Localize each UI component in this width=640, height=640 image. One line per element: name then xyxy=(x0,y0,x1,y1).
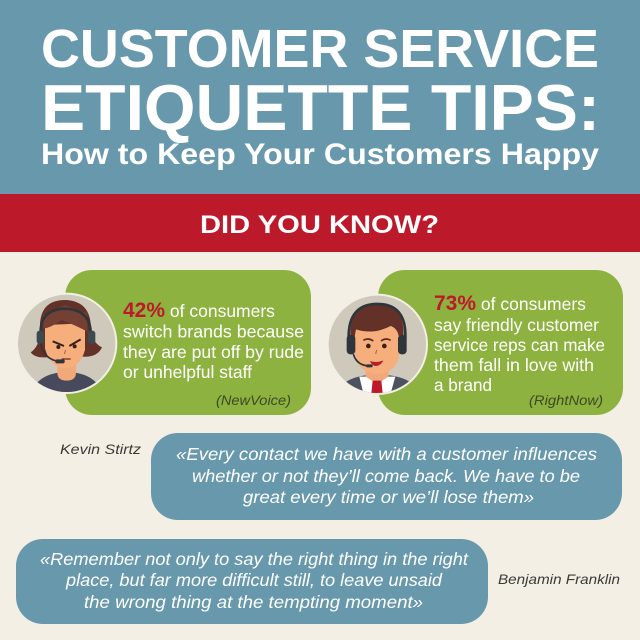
quote: Kevin Stirtz: great every time or we’ll lose them» xyxy=(243,487,534,507)
title: ETIQUETTE TIPS: xyxy=(41,71,600,144)
source: (NewVoice) xyxy=(216,392,291,408)
quote: Kevin Stirtz: whether or not they’ll come back. We have to be xyxy=(192,466,580,486)
icon: smiling male agent xyxy=(327,294,428,395)
statistic text: a brand xyxy=(434,375,492,395)
title xyxy=(41,19,600,171)
statistic text: 73% of consumers xyxy=(434,292,586,315)
panel: 42% statistic xyxy=(65,270,311,415)
source: (RightNow) xyxy=(529,392,603,408)
title: How to Keep Your Customers Happy xyxy=(41,138,599,171)
quote: Benjamin Franklin: the wrong thing at the tempting moment» xyxy=(84,592,423,612)
icon: angry female agent xyxy=(16,293,117,394)
quote: Benjamin Franklin: «Remember not only to say the right thing in the right xyxy=(40,549,469,569)
attribution: Benjamin Franklin: Benjamin Franklin xyxy=(498,571,620,587)
statistic text xyxy=(123,299,304,382)
statistic text: or unhelpful staff xyxy=(123,362,252,382)
statistic text: switch brands because xyxy=(123,322,304,342)
quote: Benjamin Franklin xyxy=(16,539,488,624)
title: CUSTOMER SERVICE xyxy=(41,19,599,79)
banner: did you know: DID YOU KNOW? xyxy=(200,211,439,239)
statistic text: 42% of consumers xyxy=(123,299,275,322)
statistic text xyxy=(434,292,605,395)
quote: Benjamin Franklin: place, but far more difficult still, to leave unsaid xyxy=(65,570,443,590)
quote: Kevin Stirtz xyxy=(151,433,622,520)
attribution: Kevin Stirtz: Kevin Stirtz xyxy=(60,441,141,457)
statistic text: they are put off by rude xyxy=(123,342,304,362)
statistic text: service reps can make xyxy=(434,335,605,355)
banner: did you know xyxy=(0,194,640,252)
header band xyxy=(0,0,640,194)
statistic text: them fall in love with xyxy=(434,355,594,375)
panel: 73% statistic xyxy=(378,270,623,415)
quote: Kevin Stirtz: «Every contact we have with a customer influences xyxy=(176,444,597,464)
statistic text: say friendly customer xyxy=(434,315,599,335)
